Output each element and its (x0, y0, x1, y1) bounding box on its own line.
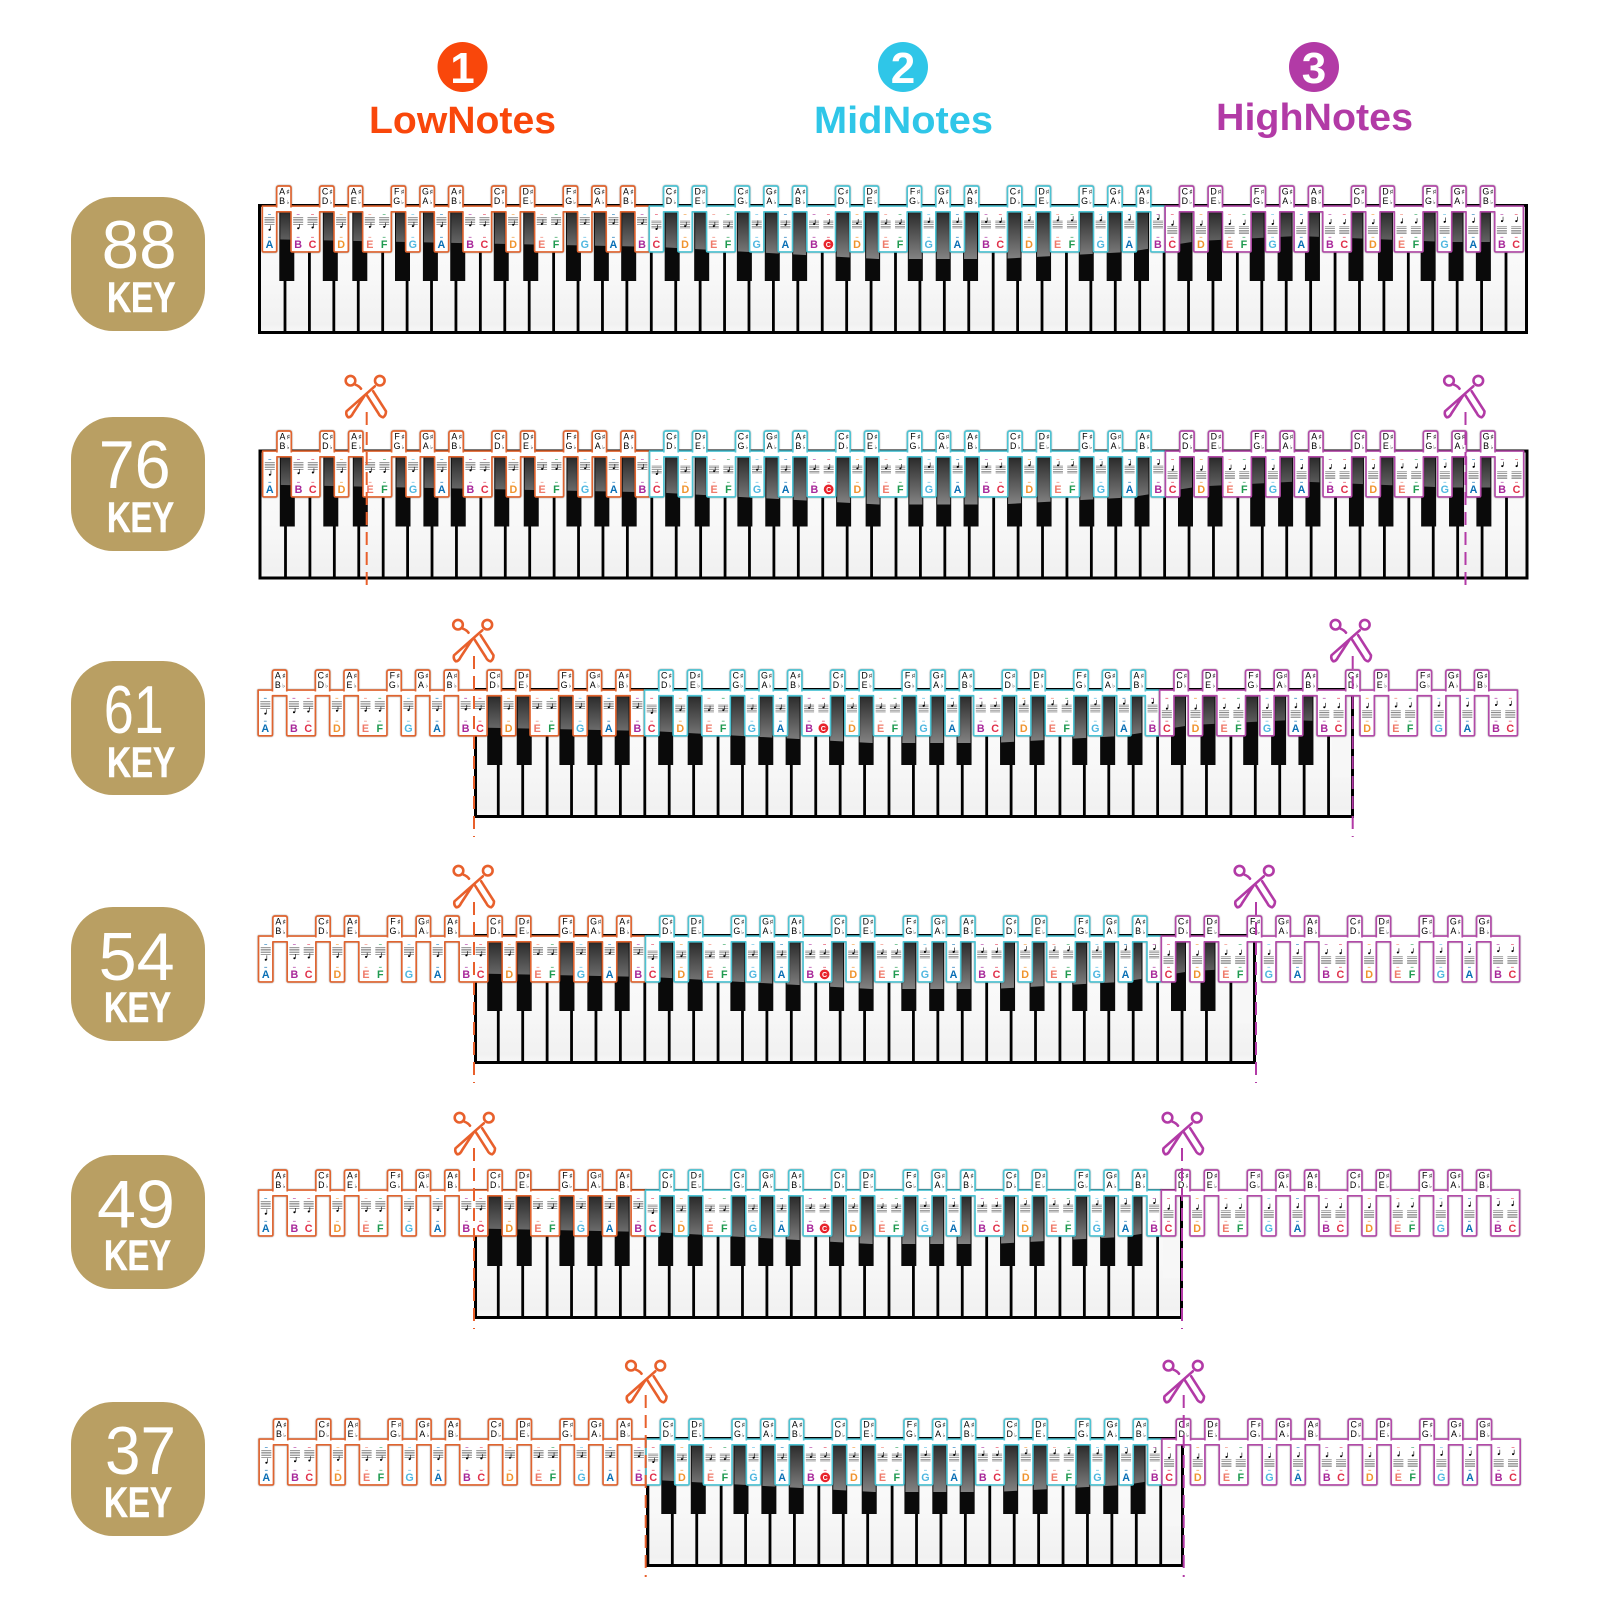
icon: number 3: 3 (1302, 44, 1326, 93)
note stickers: 76 key row: CCCCCCC (309, 484, 1521, 496)
badge: 61 key: KEY (107, 739, 175, 787)
badge: 76 key (71, 417, 205, 551)
note stickers: 54 key row: GGGGGGG (405, 969, 1445, 981)
note stickers: 54 key row (259, 916, 1520, 982)
keyboard: 54 keys (252, 934, 1522, 1065)
note stickers: 88 key row: ACAFGACDFGACDCGACDFGACDFGACDFGACDFGG (279, 187, 1489, 197)
cut line and scissors: high end (1235, 866, 1275, 1083)
icon: number 3 (1289, 42, 1339, 93)
badge: 88 key: 88 (102, 207, 177, 283)
note stickers: 49 key row: BDEGABDEGABDEGABDEGABDEGABDEGABDEGAB (275, 1180, 1485, 1190)
cut line and scissors: high end (1163, 1113, 1203, 1329)
keyboard: 61 keys (252, 688, 1522, 819)
note stickers: 76 key row: ♭♭♭♭♭♭♭♭♭♭♭♭♭♭♭♭♭♭♭♭♭♭♭♭♭♭♭♭♭♭♭♭♭♭♭♭ (287, 444, 1494, 451)
note stickers: 76 key row: C (826, 486, 831, 494)
row: 61 key (71, 620, 1522, 837)
note stickers: 37 key row: ♯♯♯♯♯♯♯♯♯♯♯♯♯♯♯♯♯♯♯♯♯♯♯♯♯♯♯♯♯♯♯♯♯♯♯♯ (283, 1423, 1490, 1429)
note stickers: 49 key row: ♭♭♭♭♭♭♭♭♭♭♭♭♭♭♭♭♭♭♭♭♭♭♭♭♭♭♭♭♭♭♭♭♭♭♭♭ (283, 1183, 1490, 1190)
badge: 37 key: 37 (105, 1413, 176, 1489)
row: 49 key (71, 1113, 1522, 1329)
badge: 49 key: 49 (97, 1166, 175, 1242)
note stickers: 37 key row: ♭♭♭♭♭♭♭♭♭♭♭♭♭♭♭♭♭♭♭♭♭♭♭♭♭♭♭♭♭♭♭♭♭♭♭♭ (283, 1432, 1490, 1439)
badge: 54 key: KEY (104, 984, 171, 1032)
note stickers: 76 key row: BBBBBBBB (295, 484, 1506, 496)
note stickers: 61 key row: ACAFGACDFGACDCGACDFGACDFGACDFGACDFGG (275, 671, 1483, 681)
note stickers: 88 key row: EEEEEEE (366, 239, 1405, 251)
cut line and scissors: high end (1331, 620, 1371, 837)
note stickers: 49 key row: C (822, 1225, 827, 1233)
badge: 61 key (71, 661, 205, 795)
note stickers: 61 key row: EEEEEEE (362, 723, 1399, 735)
note stickers: 88 key row: ♭♭♭♭♭♭♭♭♭♭♭♭♭♭♭♭♭♭♭♭♭♭♭♭♭♭♭♭♭♭♭♭♭♭♭♭ (287, 199, 1493, 206)
cut line and scissors: low end (346, 376, 386, 592)
badge: 49 key: KEY (104, 1232, 171, 1280)
note stickers: 49 key row: ACAFGACDFGACDCGACDFGACDFGACDFGACDFGG (275, 1171, 1486, 1181)
note stickers: 88 key row: DDDDDDD (337, 239, 1377, 251)
keyboard: 37 keys (255, 1437, 1525, 1568)
note stickers: 88 key row: C (826, 241, 831, 249)
note stickers: 37 key row: AAAAAAAA (262, 1472, 1474, 1484)
badge: 54 key (71, 907, 205, 1041)
note stickers: 61 key row: DDDDDDD (333, 723, 1371, 735)
note stickers: 54 key row: ♯♯♯♯♯♯♯♯♯♯♯♯♯♯♯♯♯♯♯♯♯♯♯♯♯♯♯♯♯♯♯♯♯♯♯♯ (283, 920, 1489, 926)
note stickers: 88 key row: GGGGGGG (409, 239, 1449, 251)
icon: number 1 (438, 42, 488, 93)
note stickers: 61 key row: C (821, 725, 826, 733)
note stickers: 88 key row: AAAAAAAA (266, 239, 1477, 251)
note stickers: 49 key row: GGGGGGG (405, 1223, 1445, 1235)
icon: number 1: 1 (450, 44, 475, 93)
note stickers: 54 key row: C (822, 971, 827, 979)
keyboard: 76 key cut guide (258, 450, 1528, 580)
note stickers: 54 key row: AAAAAAAA (262, 969, 1474, 981)
note stickers: 49 key row: FFFFFFF (377, 1223, 1416, 1235)
note stickers: 37 key row (259, 1419, 1520, 1485)
row: 88 key (71, 186, 1528, 335)
note stickers: 49 key row: AAAAAAAA (262, 1223, 1474, 1235)
note stickers: 76 key row: EEEEEEE (367, 484, 1405, 496)
cut line and scissors: low end (454, 866, 494, 1083)
note stickers: 49 key row: EEEEEEE (362, 1223, 1401, 1235)
note stickers: 61 key row: ♯♯♯♯♯♯♯♯♯♯♯♯♯♯♯♯♯♯♯♯♯♯♯♯♯♯♯♯♯♯♯♯♯♯♯♯ (282, 674, 1487, 680)
badge: 61 key: 61 (104, 672, 164, 748)
note stickers: 88 key row: BDEGABDEGABDEGABDEGABDEGABDEGABDEGAB (279, 196, 1489, 206)
keyboard: 49 keys (252, 1189, 1522, 1320)
cut line and scissors: high end (1444, 376, 1484, 592)
note stickers: 76 key row: ACAFGACDFGACDCGACDFGACDFGACDFGACDFGG (279, 432, 1490, 442)
keyboard: 88 keys (258, 204, 1528, 335)
icon: number 2 (878, 42, 928, 93)
note stickers: 61 key row: BDEGABDEGABDEGABDEGABDEGABDEGABDEGAB (275, 680, 1483, 690)
note stickers: 61 key row: FFFFFFF (376, 723, 1414, 735)
note stickers: 37 key row: BDEGABDEGABDEGABDEGABDEGABDEGABDEGAB (276, 1429, 1486, 1439)
note stickers: 37 key row: BBBBBBBB (291, 1472, 1503, 1484)
note stickers: 49 key row: DDDDDDD (333, 1223, 1373, 1235)
note stickers: 54 key row: BDEGABDEGABDEGABDEGABDEGABDEGABDEGAB (275, 926, 1485, 936)
note stickers: 76 key row: AAAAAAAA (266, 484, 1478, 496)
note stickers: 54 key row: FFFFFFF (377, 969, 1416, 981)
cut line and scissors: low end (453, 620, 494, 837)
heading: high notes (1216, 42, 1413, 139)
row: 76 key (71, 376, 1528, 592)
note stickers: 76 key row: FFFFFFF (381, 484, 1420, 496)
note stickers: 61 key row: GGGGGGG (404, 723, 1443, 735)
note stickers: 76 key row: BDEGABDEGABDEGABDEGABDEGABDEGABDEGAB (279, 441, 1489, 451)
note stickers: 54 key row: DDDDDDD (333, 969, 1373, 981)
cut line and scissors: low end (626, 1361, 666, 1577)
badge: 76 key: 76 (99, 427, 171, 503)
note stickers: 54 key row: ♭♭♭♭♭♭♭♭♭♭♭♭♭♭♭♭♭♭♭♭♭♭♭♭♭♭♭♭♭♭♭♭♭♭♭♭ (283, 929, 1490, 936)
note stickers: 88 key row: FFFFFFF (381, 239, 1420, 251)
note stickers: 76 key row: ♯♯♯♯♯♯♯♯♯♯♯♯♯♯♯♯♯♯♯♯♯♯♯♯♯♯♯♯♯♯♯♯♯♯♯♯ (287, 435, 1494, 441)
note stickers: 49 key row (259, 1170, 1520, 1236)
badge: 54 key: 54 (99, 919, 175, 995)
note stickers: 61 key row: BBBBBBBB (290, 723, 1500, 735)
badge: 76 key: KEY (107, 494, 174, 542)
cut line and scissors: low end (455, 1113, 495, 1329)
note stickers: 76 key row: DDDDDDD (338, 484, 1377, 496)
badge: 37 key (71, 1402, 205, 1536)
heading: low notes: LowNotes (369, 100, 556, 142)
row: 54 key (71, 866, 1522, 1083)
note stickers: 49 key row: BBBBBBBB (290, 1223, 1502, 1235)
badge: 88 key (71, 197, 205, 331)
row: 37 key (71, 1361, 1525, 1577)
note stickers: 37 key row: EEEEEEE (363, 1472, 1402, 1484)
note stickers: 37 key row: ACAFGACDFGACDCGACDFGACDFGACDFGACDFGG (276, 1420, 1486, 1430)
note stickers: 37 key row: CCCCCCC (305, 1472, 1517, 1484)
heading: mid notes (814, 42, 993, 142)
note stickers: 61 key row: CCCCCCC (304, 723, 1514, 735)
note stickers: 61 key row: AAAAAAAA (261, 723, 1471, 735)
note stickers: 54 key row: BBBBBBBB (290, 969, 1502, 981)
note stickers: 76 key row (263, 431, 1524, 497)
note stickers: 49 key row: ♯♯♯♯♯♯♯♯♯♯♯♯♯♯♯♯♯♯♯♯♯♯♯♯♯♯♯♯♯♯♯♯♯♯♯♯ (283, 1174, 1489, 1180)
note stickers: 49 key row: CCCCCCC (305, 1223, 1517, 1235)
note stickers: 88 key row: BBBBBBBB (294, 239, 1506, 251)
note stickers: 61 key row (258, 670, 1517, 736)
note stickers: 37 key row: C (823, 1474, 828, 1482)
note stickers: 54 key row: ACAFGACDFGACDCGACDFGACDFGACDFGACDFGG (275, 917, 1486, 927)
note stickers: 88 key row: CCCCCCC (309, 239, 1520, 251)
badge: 37 key: KEY (104, 1479, 172, 1527)
heading: low notes (369, 42, 556, 142)
note stickers: 54 key row: EEEEEEE (362, 969, 1401, 981)
note stickers: 37 key row: DDDDDDD (334, 1472, 1374, 1484)
note stickers: 54 key row: CCCCCCC (305, 969, 1517, 981)
note stickers: 76 key row: GGGGGGG (409, 484, 1449, 496)
badge: 88 key: KEY (107, 274, 176, 322)
badge: 49 key (71, 1155, 205, 1289)
note stickers: 61 key row: ♭♭♭♭♭♭♭♭♭♭♭♭♭♭♭♭♭♭♭♭♭♭♭♭♭♭♭♭♭♭♭♭♭♭♭♭ (282, 683, 1487, 690)
note stickers: 88 key row (262, 186, 1523, 252)
note stickers: 37 key row: GGGGGGG (405, 1472, 1446, 1484)
cut line and scissors: high end (1164, 1361, 1204, 1577)
heading: high notes: HighNotes (1216, 97, 1413, 139)
note stickers: 88 key row: ♯♯♯♯♯♯♯♯♯♯♯♯♯♯♯♯♯♯♯♯♯♯♯♯♯♯♯♯♯♯♯♯♯♯♯♯ (287, 190, 1493, 196)
icon: number 2: 2 (891, 44, 915, 93)
heading: mid notes: MidNotes (814, 100, 993, 142)
note stickers: 37 key row: FFFFFFF (378, 1472, 1416, 1484)
